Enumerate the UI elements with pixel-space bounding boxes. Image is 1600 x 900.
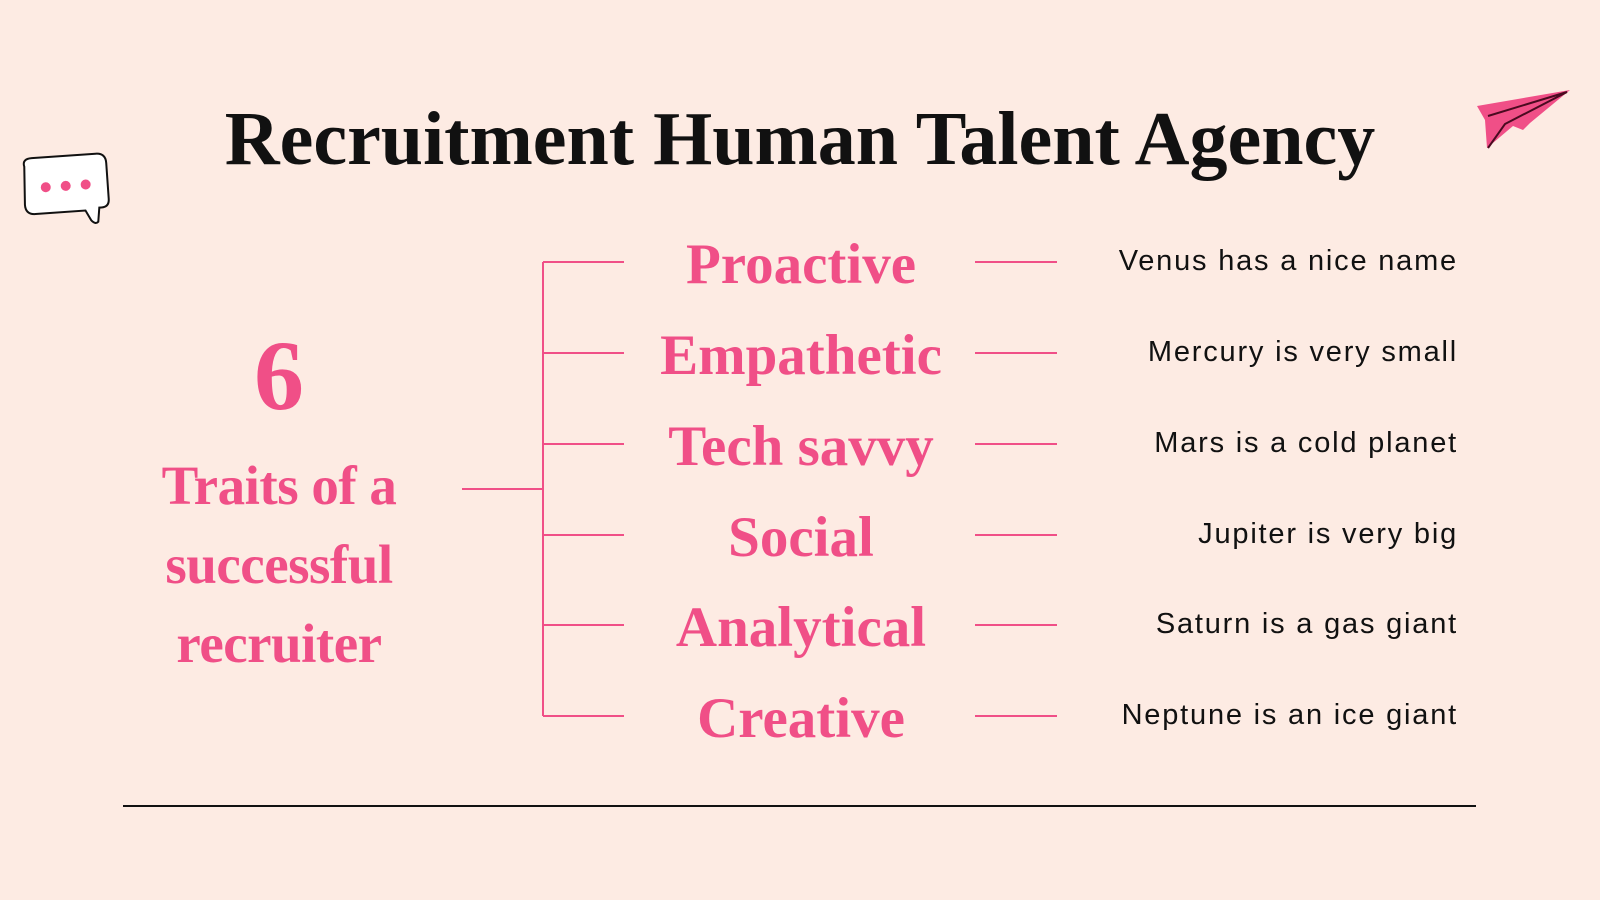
subtitle: traits of a successful recruiter: Traits of a [162, 455, 396, 516]
description 1: Venus has a nice name [1119, 245, 1458, 277]
icon: chat bubble [22, 152, 110, 224]
description 4: Jupiter is very big [1198, 518, 1458, 550]
subtitle: traits of a successful recruiter [162, 455, 396, 674]
subtitle: traits of a successful recruiter: recruiter [176, 613, 382, 674]
trait: Proactive: Proactive [686, 233, 916, 296]
big number 6: 6 [254, 320, 304, 431]
trait: Creative: Creative [697, 687, 905, 750]
icon: paper plane [1477, 90, 1570, 149]
description 5: Saturn is a gas giant [1156, 608, 1458, 640]
description 3: Mars is a cold planet [1154, 427, 1458, 459]
description 2: Mercury is very small [1148, 336, 1458, 368]
description 6: Neptune is an ice giant [1122, 699, 1458, 731]
trait: Analytical: Analytical [676, 596, 926, 659]
trait: Social: Social [728, 506, 874, 569]
subtitle: traits of a successful recruiter: successful [165, 534, 393, 595]
title: Recruitment Human Talent Agency [225, 97, 1375, 181]
trait: Empathetic: Empathetic [660, 324, 942, 387]
trait: Tech savvy: Tech savvy [668, 415, 934, 478]
